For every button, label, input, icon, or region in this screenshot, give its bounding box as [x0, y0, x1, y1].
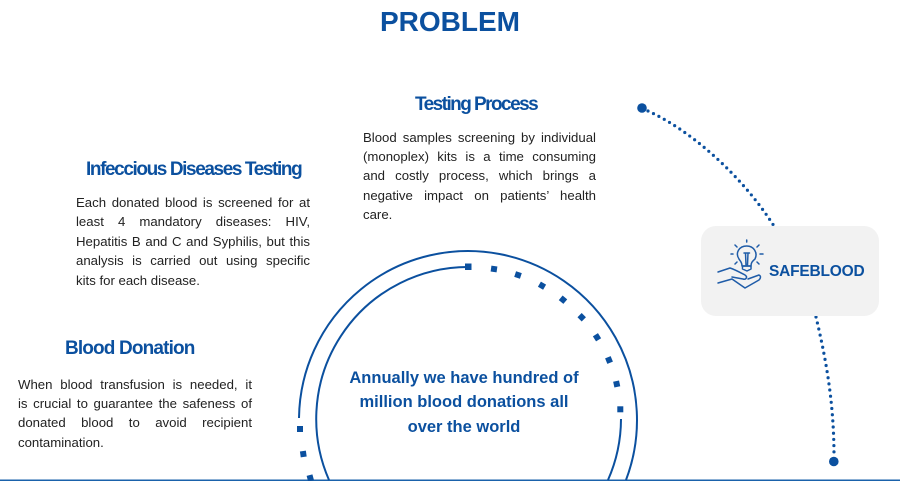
label: safeblood: SAFEBLOOD: [769, 263, 865, 280]
text: testing process: and costly process, which brings a: [363, 168, 596, 183]
text: testing process: negative impact on patients’ health: [363, 188, 596, 203]
text: infeccious diseases testing: Hepatitis B and C and Syphilis, but this: [76, 234, 310, 249]
callout: annual donations: Annually we have hundred of: [349, 369, 579, 387]
callout: annual donations: over the world: [408, 418, 520, 436]
heading: blood donation: Blood Donation: [65, 338, 195, 359]
square dotted arc right: [465, 264, 623, 412]
text: testing process: (monoplex) kits is a time consuming: [363, 149, 596, 164]
text: blood donation: [18, 376, 252, 450]
text: infeccious diseases testing: Each donated blood is screened for at: [76, 195, 310, 210]
outer arc: [299, 251, 637, 480]
baseline rule: [0, 480, 900, 481]
text: infeccious diseases testing: [76, 195, 310, 288]
heading: infeccious diseases testing: Infeccious Diseases Testing: [86, 159, 301, 180]
dotted connector top: [637, 103, 774, 226]
text: infeccious diseases testing: analysis is carried out using specific: [76, 253, 310, 268]
safeblood panel: [701, 226, 879, 316]
text: infeccious diseases testing: least 4 mandatory diseases: HIV,: [76, 214, 310, 229]
text: testing process: Blood samples screening by individual: [363, 130, 596, 144]
text: blood donation: donated blood to avoid recipient: [18, 415, 252, 430]
title: PROBLEM: [380, 6, 520, 37]
text: blood donation: contamination.: [18, 435, 104, 450]
text: testing process: [363, 130, 596, 222]
heading: testing process: Testing Process: [415, 94, 537, 115]
callout: annual donations: [349, 369, 579, 436]
text: blood donation: is crucial to guarantee the safeness of: [18, 396, 252, 411]
icon: lightbulb over hand: [718, 240, 763, 288]
callout: annual donations: million blood donations all: [360, 393, 568, 411]
dotted connector bottom: [816, 317, 839, 466]
square dotted arc left: [297, 426, 314, 481]
inner arc right: [608, 419, 621, 480]
text: testing process: care.: [363, 207, 392, 222]
text: infeccious diseases testing: kits for each disease.: [76, 273, 200, 288]
inner arc left: [316, 267, 468, 480]
text: blood donation: When blood transfusion is needed, it: [18, 376, 252, 392]
